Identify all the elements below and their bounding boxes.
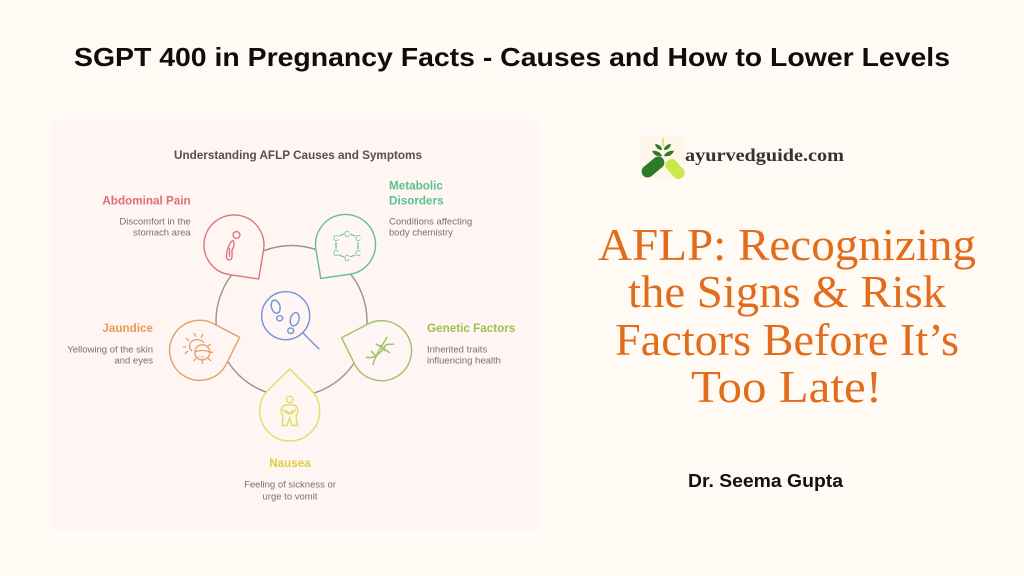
icon: person holding abdomen [226,232,240,260]
headline: AFLP: Recognizing [598,219,976,270]
icon: molecule ring: C [344,254,350,263]
title: SGPT 400 in Pregnancy Facts - Causes and How to Lower Levels [74,42,950,72]
label: nausea: Feeling of sickness or [244,480,336,490]
label: genetic factors [427,322,516,366]
drop: genetic factors [332,309,419,389]
headline: the Signs & Risk [628,266,946,317]
drop: metabolic disorders [297,203,387,296]
label: abdominal pain: Discomfort in the [119,216,191,228]
panel heading: Understanding AFLP Causes and Symptoms [174,150,422,162]
label: genetic factors: Inherited traits [427,344,487,356]
icon: molecule ring: C [355,249,361,258]
logo wordmark: ayurvedguide.com [685,145,844,165]
drop: abdominal pain [192,203,283,297]
label: nausea: urge to vomit [263,492,318,502]
label: jaundice: Yellowing of the skin [67,344,153,356]
logo: ayurvedguide.com [639,136,844,181]
icon: sun and face [183,333,213,364]
icon: molecule ring: C [333,234,339,243]
label: jaundice [67,322,153,366]
ring connecting the factors [216,246,367,396]
label: jaundice: Jaundice [102,322,153,335]
icon: molecule ring: C [344,230,350,239]
headline: Factors Before It’s [615,314,959,365]
label: genetic factors: Genetic Factors [427,322,516,335]
label: abdominal pain [102,194,191,238]
label: metabolic disorders: Metabolic [389,180,443,192]
label: nausea [244,457,336,502]
label: genetic factors: influencing health [427,356,501,366]
headline: Too Late! [691,361,882,412]
author: Dr. Seema Gupta [688,471,844,491]
label: metabolic disorders: body chemistry [389,228,453,238]
label: jaundice: and eyes [114,356,153,366]
label: abdominal pain: Abdominal Pain [102,194,191,208]
label: metabolic disorders [389,180,472,238]
icon: person holding stomach [281,396,298,426]
drop: nausea [260,369,320,441]
label: metabolic disorders: Disorders [389,194,444,208]
icon: molecule ring [333,230,361,263]
panel: AFLP causes and symptoms diagram [50,120,538,530]
icon: magnifier with footprints [262,292,319,349]
icon: molecule ring: C [355,234,361,243]
label: nausea: Nausea [269,457,311,470]
drop: jaundice [162,309,249,388]
icon: DNA strand [366,337,394,365]
icon: molecule ring: C [333,249,339,258]
headline [598,219,976,412]
label: abdominal pain: stomach area [133,228,191,238]
logo mark [639,136,687,181]
label: metabolic disorders: Conditions affecting [389,216,472,228]
